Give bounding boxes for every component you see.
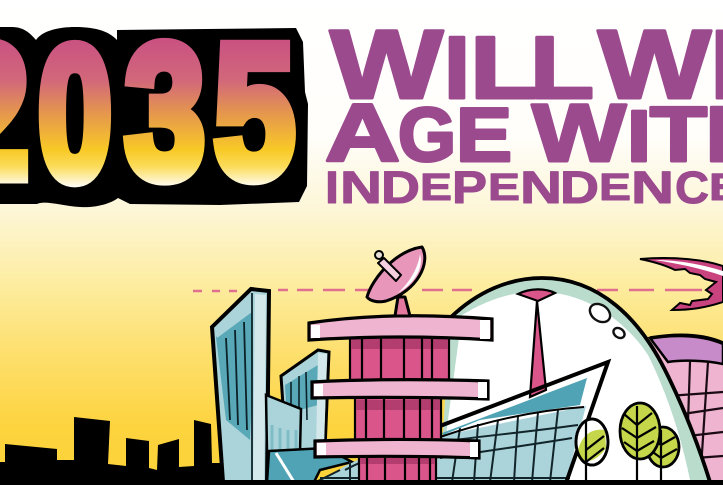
second teal tower [281, 350, 329, 450]
hall sail roof [440, 362, 608, 483]
dome bubbles [586, 300, 626, 340]
spire [518, 289, 555, 397]
title: will we age with: A [325, 88, 400, 179]
pink tower discs [309, 316, 492, 458]
trees [576, 403, 679, 482]
dashed flight path [193, 290, 702, 291]
title: will we age with: I [627, 97, 651, 177]
title: will we age with: W [330, 10, 444, 119]
rocket [640, 258, 723, 310]
title: 2035: 0 [38, 8, 112, 220]
low teal block [266, 395, 301, 452]
title: will we age with: E [456, 93, 512, 178]
glass dome [440, 278, 710, 482]
subtitle: independence: E [488, 167, 520, 209]
title: 2035: 3 [125, 6, 205, 218]
subtitle: independence: E [599, 167, 631, 209]
title: will we age with: W [598, 10, 712, 119]
subtitle: independence: N [631, 162, 674, 213]
pink tower columns [350, 336, 449, 483]
ground line [222, 480, 723, 485]
title: will we age with: W [532, 88, 627, 179]
subtitle: independence: N [340, 162, 382, 213]
subtitle: independence: D [381, 162, 420, 213]
skyline silhouette [0, 417, 225, 485]
subtitle: independence: D [560, 162, 599, 213]
title: 2035 [0, 6, 308, 220]
subtitle: independence [325, 162, 723, 213]
teal wedge roof [267, 448, 352, 483]
satellite dish [367, 247, 425, 316]
title: will we age with: L [470, 18, 538, 117]
subtitle: independence: C [675, 162, 709, 213]
subtitle: independence: P [452, 162, 487, 213]
title: will we age with: G [398, 93, 456, 178]
title: will we age with [325, 10, 723, 179]
pink building [650, 335, 723, 483]
glass hall [312, 406, 586, 482]
title: will we age with: L [530, 18, 594, 117]
tall teal tower [212, 289, 269, 482]
subtitle: independence: E [420, 167, 452, 209]
title: will we age with: T [650, 90, 707, 178]
title: 2035: 5 [214, 6, 295, 218]
title: will we age with: I [444, 18, 470, 117]
subtitle: independence: N [520, 162, 562, 213]
subtitle: independence: I [325, 162, 339, 213]
